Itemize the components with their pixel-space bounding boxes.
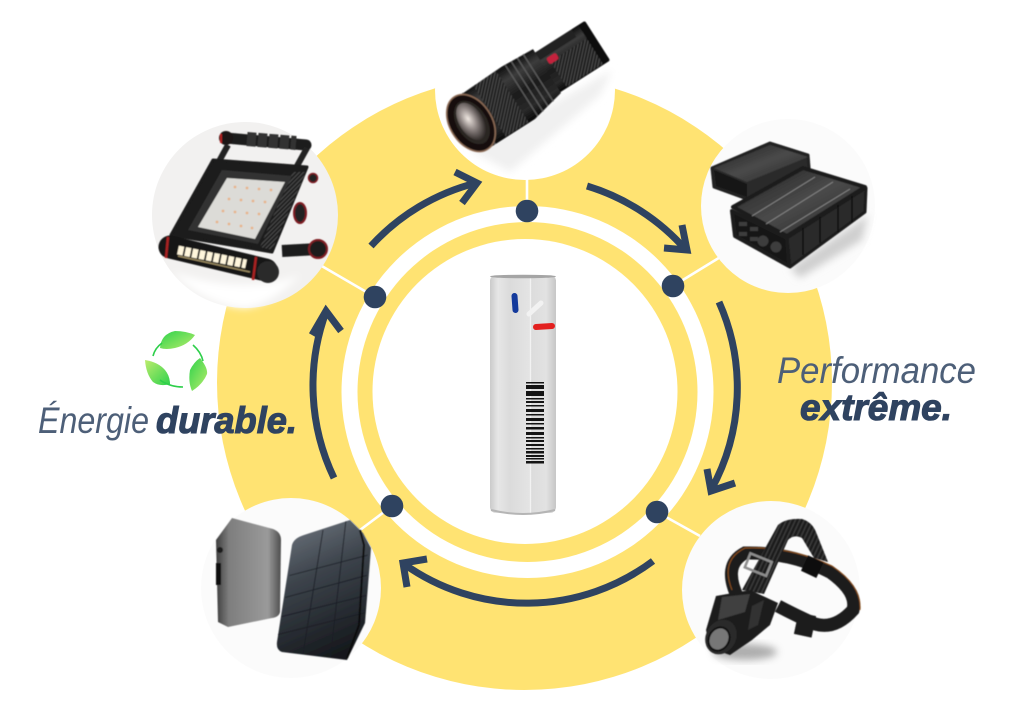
central white disc [372, 239, 678, 544]
heading: Performance extrême: Performance [777, 350, 976, 391]
heading: Énergie durable: Énergie [38, 400, 149, 441]
yellow outer disc [217, 75, 832, 690]
panel: flashlight [435, 0, 615, 180]
highlight [529, 303, 541, 314]
heading: Énergie durable: durable. [156, 400, 297, 441]
panel: solar batteries [215, 498, 381, 661]
icon: recycling leaves [145, 331, 207, 391]
icon: solar batteries [216, 518, 371, 660]
icon: headlamp [699, 519, 860, 660]
white connector lines [320, 175, 722, 536]
node dots [364, 200, 684, 523]
polarity mark: red [536, 326, 552, 327]
central battery cell [490, 275, 556, 514]
icon: flashlight [437, 16, 615, 160]
heading: Performance extrême: extrême. [800, 387, 952, 428]
white ring [342, 206, 714, 578]
icon: work light [166, 131, 327, 283]
icon: power banks [712, 143, 866, 267]
panel: power banks [701, 119, 875, 293]
barcode [526, 382, 544, 464]
cycle arrows [312, 172, 737, 603]
panel: headlamp [682, 501, 860, 679]
inner yellow ring [358, 222, 698, 562]
polarity mark: blue [514, 296, 516, 310]
panel: work light [152, 122, 338, 308]
